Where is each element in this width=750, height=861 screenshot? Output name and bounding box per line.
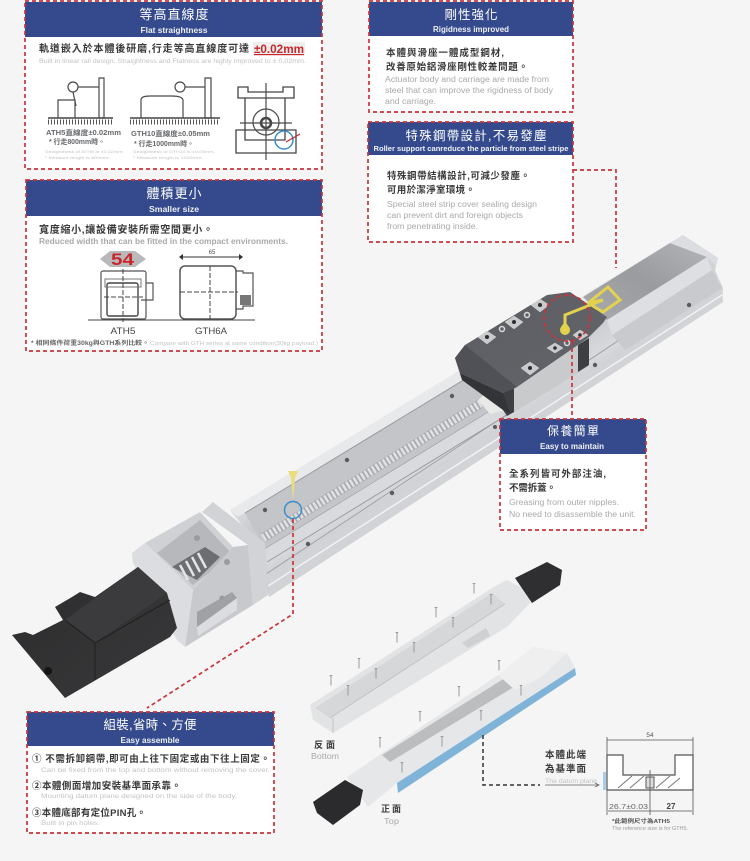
diagram: ATH5 section: [101, 269, 153, 336]
description: 全系列皆可外部注油,: [509, 468, 606, 480]
item 3: Built in pin holes.: [41, 821, 100, 827]
english description: Reduced width that can be fitted in the compact environments.: [39, 237, 288, 246]
description: 軌道嵌入於本體後研磨,行走等高直線度可達: [39, 42, 249, 55]
item 2: [32, 780, 237, 800]
dimension lines: 27: [667, 802, 676, 811]
diagram: ATH5 measurement: * 行走800mm時。: [49, 137, 105, 146]
subheading: Flat straightness: [140, 26, 208, 35]
english description: Actuator body and carriage are made from: [385, 75, 549, 84]
label: bottom: [311, 740, 339, 761]
description: [387, 170, 530, 196]
label: top: [381, 804, 401, 826]
screw indicator: [284, 471, 302, 518]
english description: [385, 75, 553, 106]
label: top: Top: [384, 817, 400, 826]
heading: 剛性強化: [444, 8, 498, 22]
description: 可用於潔淨室環境。: [387, 184, 475, 196]
heading: 保養簡單: [547, 423, 599, 438]
description: 不需拆蓋。: [509, 482, 556, 494]
subheading: Easy to maintain: [540, 442, 604, 451]
english description: [387, 200, 537, 231]
actuator body: [230, 235, 723, 597]
label: datum plane: 本體此端: [545, 749, 586, 761]
tolerance value: ±0.02mm: [254, 42, 304, 56]
diagram: GTH10 measurement: * 行走1000mm時。: [134, 139, 194, 148]
label: datum plane: The datum plane: [545, 778, 597, 785]
dimension lines: 26.7±0.03: [609, 802, 648, 811]
description: 本體與滑座一體成型鋼材,: [386, 47, 504, 59]
diagram: bottom view actuator: [310, 562, 562, 733]
heading: 體積更小: [146, 186, 202, 201]
ground line: [88, 319, 255, 321]
english description: steel that can improve the rigidness of body: [385, 86, 553, 95]
diagram: ATH5 measurement: * Measure length is 800mm.: [45, 155, 110, 160]
heading: 組裝,省時、方便: [104, 717, 197, 732]
diagram: GTH6A section: GTH6A: [195, 326, 227, 336]
description: 改善原始鋁滑座剛性較差問題。: [386, 61, 528, 73]
footnote: [31, 339, 318, 347]
subheading: Roller support canreduce the particle from steel stripe: [374, 144, 568, 153]
mounting holes: [263, 303, 691, 546]
panel: flat straightness: [25, 1, 322, 169]
panel: steel strip: [368, 122, 573, 242]
item 2: ②本體側面增加安裝基準面承靠。: [32, 780, 181, 792]
dimension 54: 54: [111, 250, 135, 269]
ball screw: [263, 388, 506, 538]
servo motor: [12, 567, 177, 698]
size notes: [612, 817, 688, 832]
diagram: GTH10 measurement: [130, 78, 220, 160]
steel strip cover: [583, 243, 707, 320]
item 1: ① 不需拆卸鋼帶,即可由上往下固定或由下往上固定。: [32, 753, 270, 765]
diagram: GTH10 measurement: Straightness of GTH10 is ±0.05mm,: [133, 149, 215, 154]
main linear actuator photo: [12, 235, 723, 698]
item 1: Can be fixed from the top and bottom without removing the cover.: [41, 768, 270, 774]
footnote: Compare with GTH series at same condition(30kg payload.): [150, 341, 318, 347]
diagram: top view actuator: [313, 647, 576, 825]
label: datum plane: 為基準面: [545, 763, 586, 775]
label: bottom: 反面: [314, 740, 335, 750]
english description: No need to disassemble the unit.: [509, 510, 636, 519]
screws: [329, 583, 493, 696]
lubrication indicator: [544, 287, 620, 341]
diagram: ATH5 measurement: Straightness of ATH5 is ±0.02mm,: [45, 149, 124, 154]
subheading: Rigidness improved: [433, 25, 509, 34]
diagram: GTH6A section: [180, 266, 253, 336]
screws: [378, 660, 523, 773]
heading: 特殊鋼帶設計,不易發塵: [406, 128, 546, 143]
item 1: [32, 753, 270, 774]
label: datum plane: [545, 749, 599, 787]
dimension 65: 65: [209, 250, 216, 256]
english description: Built in linear rail design. Straightness and Flatness are highly improved to ± 0.02mm.: [39, 59, 306, 65]
dimension lines: 54: [646, 732, 654, 739]
english description: from penetrating inside.: [387, 222, 478, 231]
description: [386, 47, 528, 73]
dimension 65: [179, 250, 243, 260]
panel: smaller size: [26, 180, 322, 351]
connector lines: [147, 170, 616, 708]
size notes: *此範例尺寸為ATH5: [612, 817, 670, 825]
panel: easy to maintain: [500, 419, 646, 530]
dimension lines: [607, 732, 693, 815]
subheading: Smaller size: [149, 205, 200, 214]
panel: rigidness improved: [369, 1, 573, 112]
english description: and carriage.: [385, 97, 436, 106]
end housing and coupling: [132, 502, 268, 647]
footnote: * 相同條件荷重30kg與GTH系列比較。: [31, 339, 149, 347]
label: bottom: Bottom: [311, 752, 339, 761]
label: top: 正面: [381, 804, 401, 814]
item 3: [32, 807, 146, 827]
english description: can prevent dirt and foreign objects: [387, 211, 523, 220]
carriage: [455, 292, 607, 416]
description: 寬度縮小,讓設備安裝所需空間更小。: [39, 223, 213, 236]
heading: 等高直線度: [140, 7, 208, 22]
dimension 54: [100, 250, 146, 269]
english description: [509, 498, 636, 519]
diagram: datum cross-section: [603, 732, 693, 832]
size notes: The reference size is for GTH5.: [612, 826, 688, 832]
item 3: ③本體底部有定位PIN孔。: [32, 807, 146, 819]
description: 特殊鋼帶結構設計,可減少發塵。: [387, 170, 530, 182]
panel: easy assemble: [27, 712, 274, 833]
datum leader line: [483, 735, 540, 785]
diagram: ATH5 section: ATH5: [110, 326, 136, 336]
english description: Greasing from outer nipples.: [509, 498, 619, 507]
diagram: cross-section: [236, 83, 300, 160]
diagram: ATH5 measurement: ATH5直線度±0.02mm: [46, 128, 121, 137]
diagram: ATH5 measurement: [45, 78, 124, 160]
diagram: GTH10 measurement: GTH10直線度±0.05mm: [131, 129, 210, 138]
english description: Special steel strip cover sealing design: [387, 200, 537, 209]
description: [509, 468, 606, 494]
subheading: Easy assemble: [120, 736, 180, 745]
end plate: [670, 235, 718, 266]
diagram: GTH10 measurement: * Measure length is 1000mm.: [133, 155, 203, 160]
item 2: Mounting datum plane designed on the side of the body.: [41, 794, 237, 800]
